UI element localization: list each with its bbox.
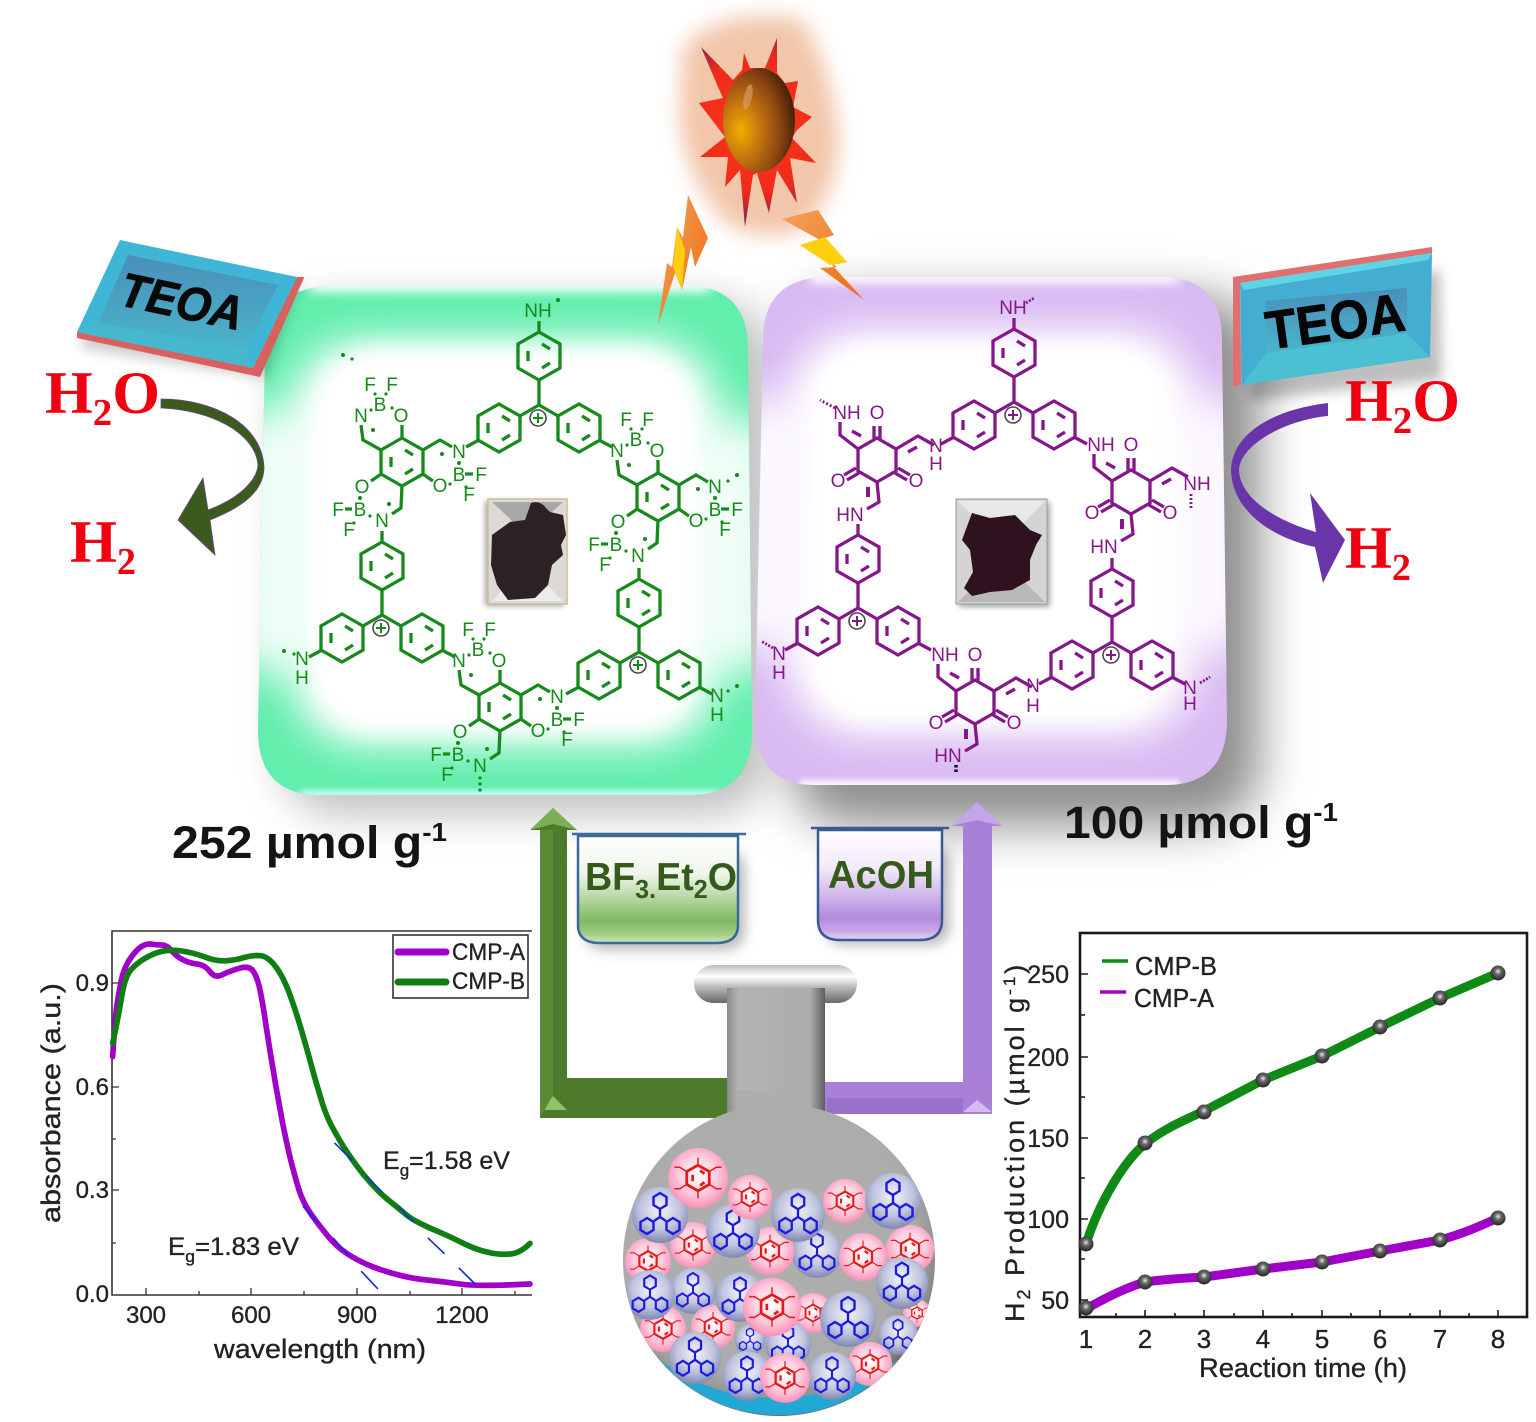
curved arrow left — [161, 399, 264, 555]
green core top right: B — [630, 430, 642, 451]
purple route arrow — [820, 802, 1002, 1114]
production x tick labels: 7 — [1433, 1324, 1447, 1354]
green molecular structure — [282, 298, 743, 792]
band gap label CMP-B: =1.58 eV — [409, 1147, 510, 1175]
yield label CMP-B: 252 µmol g — [172, 817, 406, 868]
production legend — [1100, 951, 1217, 1013]
green core top left: F — [475, 465, 487, 486]
purple core top right: O — [1085, 503, 1099, 524]
curved arrow right — [1231, 403, 1345, 583]
purple powder sample photo — [956, 499, 1050, 607]
green core top right: O — [611, 512, 625, 533]
lightning bolt right — [782, 210, 864, 300]
purple core top right: NH — [1087, 435, 1115, 456]
absorbance y tick labels: 0.6 — [76, 1074, 109, 1101]
beaker: AcOH — [811, 828, 950, 945]
purple core top left: H — [929, 454, 943, 475]
absorbance axes frame — [112, 931, 532, 1295]
green core top right: B — [709, 500, 721, 521]
flask rim — [694, 965, 857, 1003]
H2O left: 2 — [93, 392, 112, 434]
absorbance x tick labels: 300 — [126, 1302, 166, 1329]
green core top right: B — [610, 535, 622, 556]
production x axis title: Reaction time (h) — [1199, 1353, 1407, 1383]
green core bottom: F — [462, 620, 474, 641]
band gap label CMP-A: =1.83 eV — [195, 1233, 299, 1261]
green terminal amines: N — [710, 686, 724, 707]
green core bottom: N — [550, 687, 564, 708]
production y axis title: H — [1000, 1300, 1030, 1322]
H2O right: H — [1345, 368, 1392, 434]
green core bottom: F — [441, 765, 453, 786]
absorbance legend: CMP-B — [452, 968, 525, 995]
purple terminal amines: H — [772, 663, 786, 684]
green core bottom: N — [473, 756, 487, 777]
production legend: CMP-A — [1134, 983, 1215, 1013]
production axes frame — [1080, 933, 1527, 1317]
production y tick labels: 100 — [1027, 1206, 1069, 1234]
green core bottom: N — [452, 651, 466, 672]
beaker: BF3.Et2O — [572, 834, 746, 950]
green core bottom: F — [561, 730, 573, 751]
purple terminal amines: N — [1183, 678, 1197, 699]
lightning bolt left — [658, 195, 708, 325]
purple core bottom: H — [1026, 696, 1040, 717]
flask bulb — [623, 1104, 935, 1416]
purple core top right — [1085, 435, 1211, 558]
green core bottom: F — [573, 710, 585, 731]
band gap label CMP-A: E — [168, 1233, 185, 1261]
label: TEOA left — [77, 240, 304, 378]
green core bottom: B — [551, 710, 563, 731]
green core bottom — [430, 620, 585, 786]
absorbance curves — [113, 944, 530, 1288]
absorbance x tick labels: 600 — [231, 1302, 271, 1329]
green core top right: F — [731, 500, 743, 521]
production x tick labels — [1079, 1324, 1505, 1354]
production x tick labels: 5 — [1315, 1324, 1329, 1354]
purple core top left: NH — [833, 403, 861, 424]
green terminal amines: N — [295, 649, 309, 670]
green terminal amines: H — [710, 705, 724, 726]
H2 left: 2 — [117, 541, 136, 583]
purple terminal amines: N — [772, 644, 786, 665]
purple core bottom: O — [968, 645, 982, 666]
absorbance legend — [393, 935, 528, 998]
TEOA text left: TEOA — [115, 264, 248, 341]
purple core bottom: HN — [934, 746, 962, 767]
production x tick labels: 3 — [1197, 1324, 1211, 1354]
production legend: CMP-B — [1135, 951, 1217, 981]
beaker label green: 2 — [694, 874, 708, 904]
beaker label green: BF — [585, 856, 637, 899]
green terminal amines: H — [295, 668, 309, 689]
green core top left: F — [332, 500, 344, 521]
H2 left: H — [70, 509, 117, 575]
CMP-A absorbance curve — [113, 944, 530, 1285]
green core top right: F — [599, 555, 611, 576]
purple terminal amines: NH — [999, 298, 1027, 319]
left reaction: H2O to H2 — [45, 360, 264, 583]
purple core bottom: NH — [931, 645, 959, 666]
production y tick labels: 200 — [1027, 1044, 1069, 1072]
green core bottom: O — [453, 722, 467, 743]
yield label CMP-A: 100 µmol g — [1064, 797, 1298, 848]
purple core top left: O — [831, 471, 845, 492]
green core top right: N — [708, 477, 722, 498]
purple core top right: NH — [1183, 474, 1211, 495]
green core bottom: F — [430, 745, 442, 766]
green core top left: F — [364, 375, 376, 396]
green core top left: B — [354, 500, 366, 521]
green core top left: O — [355, 477, 369, 498]
green core bottom: O — [492, 651, 506, 672]
purple core top left: O — [909, 471, 923, 492]
tangent dashes — [303, 1143, 475, 1288]
absorbance y tick labels: 0.0 — [76, 1281, 109, 1308]
green terminal amines: NH — [524, 301, 552, 322]
absorbance y tick labels — [76, 970, 109, 1308]
green core top right: N — [610, 441, 624, 462]
absorbance y tick labels: 0.9 — [76, 970, 109, 997]
production y axis title: 2 — [1014, 1286, 1034, 1300]
green terminal amines — [282, 298, 739, 792]
green panel background — [258, 286, 752, 795]
purple terminal amines — [761, 298, 1210, 715]
green core top left: N — [375, 511, 389, 532]
green core bottom: F — [484, 620, 496, 641]
green powder sample photo — [485, 499, 567, 606]
sun spikes — [699, 38, 816, 227]
purple core top right: HN — [1090, 537, 1118, 558]
absorbance y axis title: absorbance (a.u.) — [36, 983, 66, 1223]
CMP-B production curve — [1086, 973, 1498, 1244]
production y tick labels: 50 — [1041, 1287, 1069, 1315]
production y tick labels: 150 — [1027, 1125, 1069, 1153]
TEOA text right: TEOA — [1262, 283, 1409, 361]
production y axis title: -1 — [1000, 974, 1019, 995]
green core top left: F — [386, 375, 398, 396]
green core top right: F — [588, 535, 600, 556]
absorbance x tick labels: 1200 — [435, 1302, 489, 1329]
H2O left: O — [112, 360, 160, 426]
sun highlight — [741, 83, 755, 111]
purple panel background — [755, 277, 1227, 785]
beaker label green: Et — [656, 856, 694, 899]
purple core top left: O — [870, 403, 884, 424]
production x tick labels: 8 — [1491, 1324, 1505, 1354]
H2O right: 2 — [1393, 400, 1412, 442]
yield label CMP-B: -1 — [422, 817, 447, 847]
H2 right: 2 — [1392, 547, 1411, 589]
purple core top right: O — [1124, 435, 1138, 456]
H2 production chart — [1000, 933, 1527, 1383]
H2O left: H — [45, 360, 92, 426]
green route arrow — [530, 808, 730, 1118]
label: TEOA right — [1233, 247, 1442, 400]
production x tick labels: 4 — [1256, 1324, 1270, 1354]
monomer spheres — [625, 1148, 934, 1403]
flask neck — [727, 988, 825, 1123]
production x tick labels: 6 — [1373, 1324, 1387, 1354]
green core top right: O — [689, 511, 703, 532]
green core bottom: B — [452, 745, 464, 766]
green core top left: F — [463, 485, 475, 506]
CMP-A production curve — [1086, 1218, 1498, 1309]
beaker label purple: AcOH — [828, 854, 934, 897]
panel: CMP-B green network — [258, 286, 752, 795]
purple core bottom — [929, 645, 1040, 774]
green core top left: O — [433, 476, 447, 497]
green core top left: N — [354, 406, 368, 427]
purple core bottom: N — [1026, 676, 1040, 697]
purple core top left — [820, 400, 943, 526]
purple core top right: O — [1163, 503, 1177, 524]
purple molecular structure — [761, 298, 1211, 774]
absorbance y tick labels: 0.3 — [76, 1177, 109, 1204]
absorbance x axis title: wavelength (nm) — [213, 1334, 426, 1364]
absorbance chart — [36, 931, 532, 1364]
H2 right: H — [1345, 515, 1392, 581]
sun — [680, 16, 838, 235]
production y axis title: Production (µmol g — [1000, 995, 1030, 1286]
production y axis title: ) — [1000, 962, 1030, 974]
CMP-A data markers — [1078, 1210, 1506, 1316]
panel: CMP-A purple network — [755, 277, 1227, 785]
green core top right — [588, 410, 743, 576]
purple core bottom: O — [1007, 713, 1021, 734]
production x tick labels: 1 — [1079, 1324, 1093, 1354]
purple core bottom: O — [929, 713, 943, 734]
green core top right: F — [642, 410, 654, 431]
green core top right: F — [719, 520, 731, 541]
solvent — [660, 1360, 898, 1415]
yield label CMP-A: -1 — [1313, 797, 1338, 827]
panel shadows — [280, 296, 1260, 826]
band gap label CMP-B: E — [383, 1147, 400, 1175]
round-bottom flask with monomer spheres — [623, 965, 935, 1416]
purple core top left: N — [929, 436, 943, 457]
green core bottom: O — [531, 721, 545, 742]
green core top left: F — [343, 520, 355, 541]
green core top left: B — [374, 395, 386, 416]
beaker label green: O — [708, 856, 737, 899]
green core top right: N — [631, 546, 645, 567]
absorbance legend: CMP-A — [452, 939, 525, 966]
purple core top left: HN — [836, 505, 864, 526]
green core top left — [332, 375, 487, 541]
sun glow — [680, 16, 838, 235]
neck blend — [738, 1090, 810, 1126]
beaker label green: 3. — [635, 874, 656, 904]
absorbance x tick labels — [126, 1302, 489, 1329]
absorbance x tick labels: 900 — [337, 1302, 377, 1329]
right reaction: H2O to H2 — [1231, 368, 1460, 589]
production y tick labels — [1027, 961, 1069, 1315]
H2O right: O — [1412, 368, 1460, 434]
CMP-B data markers — [1078, 966, 1506, 1252]
green core bottom: B — [472, 640, 484, 661]
sun body — [723, 68, 795, 172]
green core top right: O — [650, 441, 664, 462]
production x tick labels: 2 — [1138, 1324, 1152, 1354]
purple terminal amines: H — [1183, 694, 1197, 715]
band gap label CMP-B: g — [400, 1161, 409, 1180]
green core top left: N — [452, 442, 466, 463]
green core top right: F — [620, 410, 632, 431]
green core top left: O — [394, 406, 408, 427]
CMP-B absorbance curve — [113, 950, 530, 1254]
band gap label CMP-A: g — [185, 1247, 195, 1266]
production y tick labels: 250 — [1027, 961, 1069, 989]
green core top left: B — [453, 465, 465, 486]
